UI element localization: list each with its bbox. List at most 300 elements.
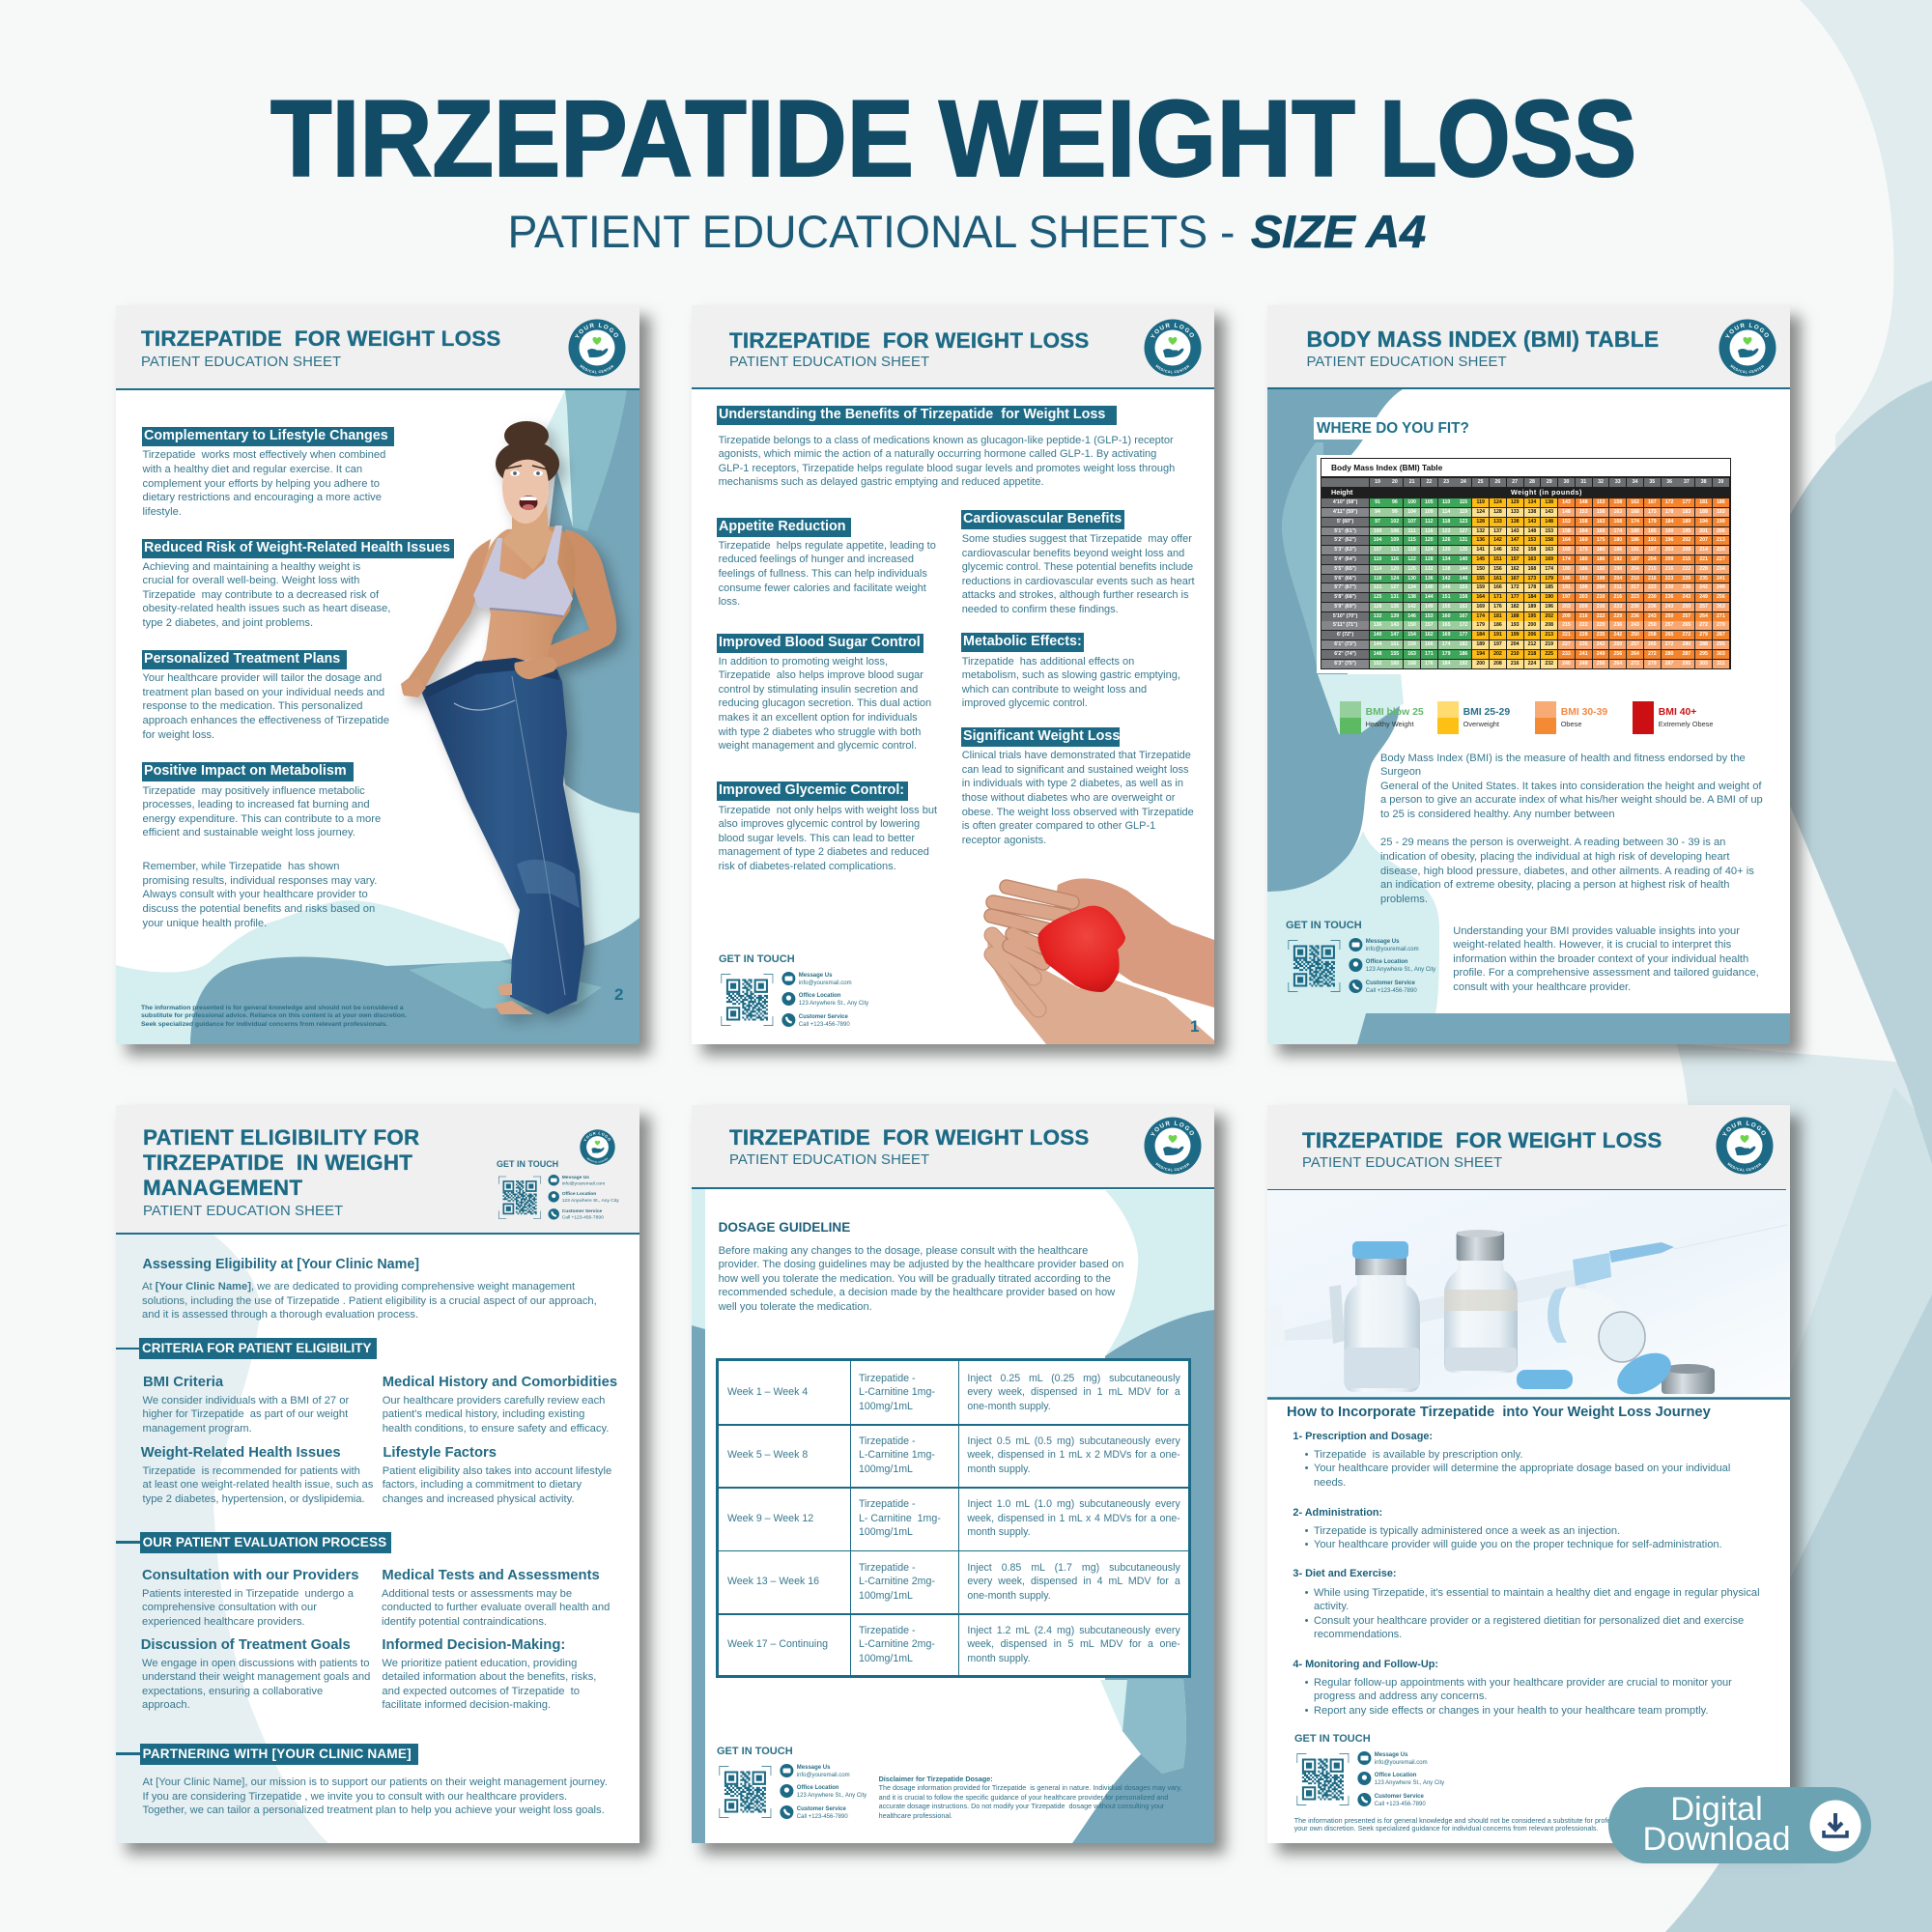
BMI table: 35 bbox=[1649, 479, 1655, 485]
dosage table: L-Carnitine 1mg- bbox=[859, 1386, 935, 1398]
BMI table: 5' (60") bbox=[1337, 519, 1353, 525]
BMI table: 191 bbox=[1648, 537, 1657, 543]
BMI table: 250 bbox=[1665, 613, 1673, 619]
contact block: Office Location bbox=[561, 1191, 596, 1197]
sheet title: TIRZEPATIDE FOR WEIGHT LOSS bbox=[729, 328, 1090, 352]
text: treatment goals: understand their weight management goals and bbox=[142, 1671, 370, 1683]
BMI table: 206 bbox=[1717, 528, 1725, 534]
heading: glycemic: Improved Glycemic Control: bbox=[719, 782, 904, 798]
BMI table: 197 bbox=[1562, 594, 1571, 600]
dosage table: week, dispensed in 1 mL x 2 MDVs for a one- bbox=[967, 1449, 1180, 1461]
BMI table: 235 bbox=[1597, 632, 1605, 638]
subheading: medical history: Medical History and Comorbidities bbox=[383, 1375, 617, 1390]
BMI table: 172 bbox=[1665, 499, 1673, 505]
contact block: Message Us bbox=[798, 973, 833, 979]
digital download badge: Download bbox=[1643, 1821, 1790, 1858]
header bbox=[692, 305, 1214, 389]
BMI table: 6' (72") bbox=[1337, 632, 1353, 638]
BMI table: 256 bbox=[1717, 594, 1725, 600]
BMI table: 32 bbox=[1598, 479, 1604, 485]
BMI table: 186 bbox=[1597, 556, 1605, 562]
logo bbox=[580, 1129, 615, 1165]
logo bbox=[1716, 1117, 1774, 1175]
BMI table: 5'10" (70") bbox=[1333, 613, 1357, 619]
section bar: evaluation: OUR PATIENT EVALUATION PROCESS bbox=[143, 1535, 386, 1549]
BMI table: 186 bbox=[1613, 547, 1622, 553]
text: BMI definition: General of the United States. It takes into consideration the height and weight of bbox=[1380, 781, 1762, 792]
text: intro: mechanisms such as delayed gastric emptying and reduced appetite. bbox=[719, 476, 1044, 488]
legend: Healthy Weight bbox=[1366, 719, 1414, 728]
BMI table: 116 bbox=[1391, 556, 1399, 562]
text: appetite: reduced feelings of hunger and increased bbox=[719, 554, 914, 565]
heading: appetite: Appetite Reduction bbox=[719, 518, 845, 533]
text: significant: is often greater compared to other GLP-1 bbox=[962, 820, 1155, 832]
BMI table: 138 bbox=[1511, 519, 1520, 525]
text: partnering bbox=[143, 1776, 608, 1818]
BMI table: 171 bbox=[1493, 594, 1502, 600]
dosage table: Inject 0.5 mL (0.5 mg) subcutaneously every bbox=[967, 1435, 1180, 1447]
header bbox=[692, 1105, 1214, 1189]
BMI table: 143 bbox=[1545, 509, 1553, 515]
BMI table: 288 bbox=[1699, 641, 1708, 647]
BMI table: 6'3" (75") bbox=[1334, 661, 1356, 667]
BMI table: 5'4" (64") bbox=[1334, 556, 1356, 562]
BMI table: 174 bbox=[1442, 641, 1450, 647]
text: understanding BMI bbox=[1453, 925, 1759, 993]
BMI table: 5'3" (63") bbox=[1334, 547, 1356, 553]
text: reminder: Always consult with your healthcare provider to bbox=[143, 889, 368, 900]
text: BMI criteria bbox=[143, 1395, 350, 1435]
BMI table: 149 bbox=[1425, 604, 1434, 610]
text: metabolic: improved glycemic control. bbox=[962, 697, 1088, 709]
BMI table: 192 bbox=[1613, 556, 1622, 562]
BMI table: 209 bbox=[1562, 613, 1571, 619]
BMI table: 5'9" (69") bbox=[1334, 604, 1356, 610]
step 3: 3- Diet and Exercise: bbox=[1293, 1568, 1397, 1579]
text: glycemic: management of type 2 diabetes and reduced bbox=[719, 846, 929, 858]
contact block: Customer Service bbox=[561, 1208, 602, 1214]
BMI table: 199 bbox=[1511, 632, 1520, 638]
text: assessing eligibility: solutions, including the use of Tirzepatide . Patient eligibility is a crucial aspect of our approach, bbox=[142, 1295, 597, 1307]
contact block bbox=[497, 1159, 619, 1221]
text: appetite bbox=[719, 540, 936, 608]
BMI table: 97 bbox=[1375, 519, 1380, 525]
BMI table: 157 bbox=[1425, 622, 1434, 628]
BMI table: 199 bbox=[1717, 519, 1725, 525]
BMI table: 223 bbox=[1613, 604, 1622, 610]
text: complementary: lifestyle. bbox=[143, 506, 182, 518]
contact block: Message Us bbox=[1365, 939, 1400, 945]
text: significant: Clinical trials have demonstrated that Tirzepatide bbox=[962, 750, 1191, 761]
BMI table: 200 bbox=[1476, 661, 1485, 667]
BMI table: 151 bbox=[1442, 594, 1450, 600]
BMI table: 209 bbox=[1665, 556, 1673, 562]
BMI table: 5'2" (62") bbox=[1334, 537, 1356, 543]
BMI table: 141 bbox=[1476, 547, 1485, 553]
heading: dosage guideline: DOSAGE GUIDELINE bbox=[719, 1219, 850, 1235]
BMI table: 242 bbox=[1597, 641, 1605, 647]
text: treatment goals: approach. bbox=[142, 1699, 190, 1711]
BMI table: 243 bbox=[1631, 622, 1639, 628]
text: partnering: If you are considering Tirzepatide , we invite you to consult with our healthcare providers. bbox=[143, 1791, 567, 1803]
BMI table: 192 bbox=[1460, 661, 1467, 667]
BMI table: 153 bbox=[1528, 537, 1536, 543]
BMI table: 197 bbox=[1631, 556, 1639, 562]
text: dosage intro: Before making any changes to the dosage, please consult with the healthcare bbox=[719, 1245, 1088, 1257]
text: consultation: comprehensive consultation with our bbox=[142, 1602, 317, 1613]
BMI table: 153 bbox=[1425, 613, 1434, 619]
BMI table: 235 bbox=[1699, 576, 1708, 582]
BMI table: 235 bbox=[1579, 641, 1588, 647]
BMI table: 208 bbox=[1683, 547, 1690, 553]
text: lifestyle: changes and increased physical activity. bbox=[383, 1493, 574, 1505]
subtitle: PATIENT EDUCATIONAL SHEETS - bbox=[508, 206, 1235, 257]
BMI table: 188 bbox=[1699, 509, 1708, 515]
dosage table: 100mg/1mL bbox=[859, 1653, 913, 1664]
BMI table: 198 bbox=[1579, 584, 1588, 590]
text: understanding BMI: information within the broader context of your individual health bbox=[1453, 953, 1748, 965]
heading: how to incorporate: How to Incorporate Tirzepatide into Your Weight Loss Journey bbox=[1287, 1405, 1711, 1420]
BMI table: 158 bbox=[1597, 509, 1605, 515]
BMI table: 232 bbox=[1545, 661, 1553, 667]
text: decision making: facilitate informed decision-making. bbox=[382, 1699, 551, 1711]
BMI table: 179 bbox=[1545, 576, 1553, 582]
BMI table: 159 bbox=[1407, 641, 1416, 647]
BMI table: 295 bbox=[1717, 641, 1725, 647]
sheet title: PATIENT ELIGIBILITY FOR bbox=[143, 1125, 419, 1150]
footnote: The information presented is for general knowledge and should not be considered a bbox=[141, 1005, 404, 1010]
text: significant bbox=[962, 750, 1194, 846]
BMI table: 118 bbox=[1442, 519, 1450, 525]
BMI table: 174 bbox=[1613, 528, 1622, 534]
text: significant: receptor agonists. bbox=[962, 835, 1046, 846]
text: cardiovascular: Some studies suggest that Tirzepatide may offer bbox=[962, 533, 1192, 545]
sheet subtitle: PATIENT EDUCATION SHEET bbox=[1302, 1155, 1502, 1171]
BMI table: 133 bbox=[1493, 519, 1502, 525]
text: BMI ranges bbox=[1380, 837, 1754, 905]
step 3: recommendations. bbox=[1314, 1629, 1402, 1640]
BMI table: 210 bbox=[1597, 594, 1605, 600]
BMI table: 107 bbox=[1407, 519, 1416, 525]
step 1: Tirzepatide is available by prescription only. bbox=[1314, 1449, 1522, 1461]
text: consultation: experienced healthcare providers. bbox=[142, 1616, 305, 1628]
text: intro bbox=[719, 435, 1175, 488]
BMI table: 135 bbox=[1460, 547, 1467, 553]
BMI table: 229 bbox=[1613, 613, 1622, 619]
contact block: GET IN TOUCH bbox=[719, 953, 794, 965]
BMI table: 227 bbox=[1717, 556, 1725, 562]
text: blood sugar: In addition to promoting weight loss, bbox=[719, 656, 888, 668]
BMI table: 163 bbox=[1545, 547, 1553, 553]
dosage table: L- Carnitine 1mg- bbox=[859, 1513, 941, 1524]
heading: significant: Significant Weight Loss bbox=[963, 728, 1120, 744]
disclaimer: and it is crucial to follow the specific guidance of your healthcare provider for personalized and bbox=[879, 1793, 1168, 1802]
BMI table: 264 bbox=[1699, 613, 1708, 619]
BMI table: 168 bbox=[1613, 519, 1622, 525]
text: lifestyle: factors, including a commitment to dietary bbox=[383, 1479, 582, 1491]
step 4: Report any side effects or changes in your health to your healthcare team promptly. bbox=[1314, 1705, 1708, 1717]
dosage table: Week 13 – Week 16 bbox=[727, 1576, 819, 1587]
BMI table: 168 bbox=[1631, 509, 1639, 515]
BMI table: 147 bbox=[1511, 537, 1520, 543]
BMI table: 212 bbox=[1528, 641, 1536, 647]
BMI table: 180 bbox=[1631, 528, 1639, 534]
text: medical history: Our healthcare providers carefully review each bbox=[383, 1395, 605, 1406]
text: understanding BMI: weight-related health. However, it is crucial to interpret this bbox=[1453, 939, 1731, 951]
BMI table: 250 bbox=[1613, 641, 1622, 647]
BMI table: 216 bbox=[1579, 613, 1588, 619]
BMI table: 228 bbox=[1699, 566, 1708, 572]
BMI table: 178 bbox=[1665, 509, 1673, 515]
BMI table: 119 bbox=[1476, 499, 1485, 505]
dosage table: week, dispensed in 5 mL MDV for a one- bbox=[967, 1638, 1180, 1650]
contact block: Call +123-456-7890 bbox=[1365, 988, 1417, 994]
panel: sheet 5 dosage guideline bbox=[692, 1105, 1214, 1843]
text: metabolism: Tirzepatide may positively influence metabolic bbox=[143, 785, 365, 797]
logo: MEDICAL CENTER bbox=[1155, 365, 1190, 373]
dosage table: every week, dispensed in 1 mL MDV for a bbox=[967, 1386, 1180, 1398]
text: metabolic: which can contribute to weight loss and bbox=[962, 684, 1147, 696]
BMI table: 163 bbox=[1407, 651, 1416, 657]
text: reduced risk: Tirzepatide may contribute to a decreased risk of bbox=[143, 589, 379, 601]
BMI table: 158 bbox=[1579, 519, 1588, 525]
text: treatment goals: We engage in open discussions with patients to bbox=[142, 1658, 369, 1669]
BMI table: 158 bbox=[1613, 499, 1622, 505]
dosage table: Tirzepatide - bbox=[859, 1373, 915, 1384]
BMI table: 248 bbox=[1579, 661, 1588, 667]
BMI table: 105 bbox=[1425, 499, 1434, 505]
step 1: 1- Prescription and Dosage: bbox=[1293, 1431, 1433, 1442]
BMI table: 229 bbox=[1683, 576, 1690, 582]
step 3: While using Tirzepatide, it's essential to maintain a healthy diet and engage in regular physical bbox=[1314, 1587, 1760, 1599]
BMI table: 153 bbox=[1597, 499, 1605, 505]
BMI table: 186 bbox=[1631, 537, 1639, 543]
text: blood sugar bbox=[719, 656, 931, 752]
contact block bbox=[1294, 1730, 1459, 1809]
BMI table: 185 bbox=[1648, 528, 1657, 534]
dosage table: 100mg/1mL bbox=[859, 1526, 913, 1538]
BMI table: 164 bbox=[1579, 528, 1588, 534]
BMI table: 38 bbox=[1701, 479, 1706, 485]
BMI table: 202 bbox=[1545, 613, 1553, 619]
sheet subtitle: PATIENT EDUCATION SHEET bbox=[1306, 355, 1507, 370]
BMI table: 177 bbox=[1683, 499, 1690, 505]
BMI table: 176 bbox=[1425, 661, 1434, 667]
text: medical history: health conditions, to ensure safety and efficacy. bbox=[383, 1423, 609, 1435]
BMI table: 256 bbox=[1597, 661, 1605, 667]
text: personalized: response to the medication. This personalized bbox=[143, 700, 363, 712]
BMI table: 197 bbox=[1493, 641, 1502, 647]
BMI table: 250 bbox=[1631, 632, 1639, 638]
contact block: GET IN TOUCH bbox=[1286, 920, 1361, 931]
dosage table: Tirzepatide - bbox=[859, 1435, 915, 1447]
BMI table: 138 bbox=[1407, 594, 1416, 600]
title bbox=[270, 78, 1636, 199]
BMI table: 128 bbox=[1425, 556, 1434, 562]
dosage table: Inject 1.0 mL (1.0 mg) subcutaneously every bbox=[967, 1498, 1180, 1510]
BMI table: 311 bbox=[1717, 661, 1725, 667]
text: personalized: for weight loss. bbox=[143, 729, 214, 741]
logo: MEDICAL CENTER bbox=[580, 365, 614, 373]
contact block: GET IN TOUCH bbox=[497, 1159, 558, 1169]
BMI table: 271 bbox=[1717, 613, 1725, 619]
BMI table: 216 bbox=[1613, 594, 1622, 600]
BMI table: 164 bbox=[1562, 537, 1571, 543]
logo: YOUR LOGO bbox=[574, 323, 618, 338]
BMI table: 303 bbox=[1699, 661, 1708, 667]
header bbox=[116, 1105, 639, 1235]
text: metabolic: Tirzepatide has additional effects on bbox=[962, 656, 1134, 668]
text: partnering: At [Your Clinic Name], our mission is to support our patients on their weight management journey. bbox=[143, 1776, 608, 1788]
BMI table: 150 bbox=[1407, 622, 1416, 628]
header bbox=[1267, 305, 1790, 389]
BMI table: 216 bbox=[1511, 661, 1520, 667]
dosage table: Inject 0.25 mL (0.25 mg) subcutaneously bbox=[967, 1373, 1180, 1384]
contact block bbox=[1286, 920, 1435, 994]
BMI table: 241 bbox=[1717, 576, 1725, 582]
BMI table: 189 bbox=[1528, 604, 1536, 610]
BMI table bbox=[1317, 455, 1734, 673]
BMI table: 204 bbox=[1631, 566, 1639, 572]
BMI table: 160 bbox=[1442, 613, 1450, 619]
BMI table: 225 bbox=[1545, 651, 1553, 657]
BMI table: 207 bbox=[1699, 537, 1708, 543]
dosage table: Tirzepatide - bbox=[859, 1625, 915, 1636]
BMI table: 174 bbox=[1476, 613, 1485, 619]
BMI table: 91 bbox=[1375, 499, 1380, 505]
header bbox=[116, 305, 639, 390]
text: dosage intro: how well you tolerate the medication. You will be gradually titrated according to the bbox=[719, 1273, 1111, 1285]
step 4: • bbox=[1305, 1677, 1308, 1689]
BMI table: 5'11" (71") bbox=[1333, 622, 1357, 628]
text: personalized: treatment plan based on your individual needs and bbox=[143, 687, 384, 698]
BMI table: 153 bbox=[1460, 584, 1467, 590]
BMI table: 229 bbox=[1597, 622, 1605, 628]
text: complementary: complement your efforts by helping you adhere to bbox=[143, 478, 380, 490]
BMI table: 162 bbox=[1460, 604, 1467, 610]
text: weight related: type 2 diabetes, hypertension, or dyslipidemia. bbox=[143, 1493, 365, 1505]
BMI table: 184 bbox=[1476, 632, 1485, 638]
BMI table: 215 bbox=[1683, 556, 1690, 562]
BMI table: 142 bbox=[1493, 537, 1502, 543]
BMI table: 272 bbox=[1631, 661, 1639, 667]
BMI table: 144 bbox=[1374, 641, 1381, 647]
BMI table: 194 bbox=[1699, 519, 1708, 525]
text: blood sugar: with type 2 diabetes who struggle with both bbox=[719, 726, 921, 738]
contact block: Call +123-456-7890 bbox=[797, 1814, 848, 1820]
BMI table: 227 bbox=[1562, 641, 1571, 647]
BMI table: 295 bbox=[1683, 661, 1690, 667]
sheet subtitle: PATIENT EDUCATION SHEET bbox=[143, 1204, 343, 1219]
BMI table: 185 bbox=[1545, 584, 1553, 590]
BMI table: 193 bbox=[1511, 622, 1520, 628]
BMI table: 151 bbox=[1391, 641, 1399, 647]
text: intro: agonists, which mimic the action of a naturally occurring hormone called GLP-1. By activating bbox=[719, 448, 1156, 460]
step 1: needs. bbox=[1314, 1477, 1346, 1489]
BMI table: 129 bbox=[1511, 499, 1520, 505]
BMI table: 258 bbox=[1648, 632, 1657, 638]
BMI table: 204 bbox=[1597, 584, 1605, 590]
text: lifestyle: Patient eligibility also takes into account lifestyle bbox=[383, 1465, 611, 1477]
disclaimer: accurate dosage instructions. Do not modify your Tirzepatide dosage without consulting your bbox=[879, 1802, 1164, 1810]
BMI table: 169 bbox=[1562, 547, 1571, 553]
step 3: Consult your healthcare provider or a registered dietitian for personalized diet and exercise bbox=[1314, 1615, 1744, 1627]
subheading: treatment goals: Discussion of Treatment Goals bbox=[141, 1636, 351, 1652]
text: reduced risk: obesity-related health issues such as heart disease, bbox=[143, 603, 390, 614]
subheading: consultation: Consultation with our Providers bbox=[142, 1567, 358, 1582]
BMI table: 22 bbox=[1426, 479, 1432, 485]
BMI table: 210 bbox=[1511, 651, 1520, 657]
contact block: Office Location bbox=[798, 993, 840, 999]
dosage table: one-month supply. bbox=[967, 1590, 1051, 1602]
text: cardiovascular bbox=[962, 533, 1195, 615]
BMI table: 163 bbox=[1613, 509, 1622, 515]
BMI table: 190 bbox=[1665, 528, 1673, 534]
text: dosage intro: well you tolerate the medication. bbox=[719, 1301, 872, 1313]
BMI table: 184 bbox=[1442, 661, 1450, 667]
text: reminder: Remember, while Tirzepatide has shown bbox=[143, 861, 339, 872]
BMI table: 249 bbox=[1699, 594, 1708, 600]
BMI table: 191 bbox=[1493, 632, 1502, 638]
BMI table: 166 bbox=[1425, 641, 1434, 647]
BMI table: 265 bbox=[1683, 622, 1690, 628]
BMI table: 256 bbox=[1613, 651, 1622, 657]
BMI table: 263 bbox=[1717, 604, 1725, 610]
text: cardiovascular: needed to confirm these findings. bbox=[962, 604, 1119, 615]
BMI table: 186 bbox=[1579, 566, 1588, 572]
BMI table: 280 bbox=[1683, 641, 1690, 647]
text: appetite: consume fewer calories and facilitate weight bbox=[719, 582, 926, 594]
illustration: woman in oversized jeans bbox=[401, 421, 630, 1028]
BMI table: Body Mass Index (BMI) Table bbox=[1331, 463, 1442, 472]
BMI table: 250 bbox=[1683, 604, 1690, 610]
legend: Overweight bbox=[1463, 719, 1499, 728]
BMI table: 155 bbox=[1476, 576, 1485, 582]
BMI table: 217 bbox=[1631, 584, 1639, 590]
BMI table: 152 bbox=[1511, 547, 1520, 553]
legend: BMI blow 25 bbox=[1366, 707, 1424, 718]
dosage table: week, dispensed in 1 mL x 4 MDVs for a one- bbox=[967, 1513, 1180, 1524]
text: metabolism bbox=[143, 785, 381, 838]
sheet title bbox=[143, 1125, 419, 1200]
BMI table: 116 bbox=[1425, 528, 1434, 534]
text: understanding BMI: Understanding your BMI provides valuable insights into your bbox=[1453, 925, 1740, 937]
BMI table: 194 bbox=[1476, 651, 1485, 657]
BMI table: 25 bbox=[1478, 479, 1484, 485]
text: dosage intro bbox=[719, 1244, 1123, 1315]
logo: YOUR LOGO bbox=[1721, 1121, 1766, 1136]
dosage table: month supply. bbox=[967, 1526, 1031, 1538]
contact block bbox=[717, 1743, 881, 1822]
dosage table: 100mg/1mL bbox=[859, 1401, 913, 1412]
BMI table: 216 bbox=[1597, 604, 1605, 610]
dosage table: one-month supply. bbox=[967, 1401, 1051, 1412]
text: metabolic bbox=[962, 656, 1180, 709]
BMI table: 21 bbox=[1409, 479, 1414, 485]
BMI table: 219 bbox=[1545, 641, 1553, 647]
BMI table: 148 bbox=[1545, 519, 1553, 525]
text: cardiovascular: attacks and strokes, although further research is bbox=[962, 589, 1188, 601]
logo: YOUR LOGO bbox=[1150, 323, 1194, 338]
dosage table: month supply. bbox=[967, 1653, 1031, 1664]
BMI table: 128 bbox=[1374, 604, 1381, 610]
BMI table: 140 bbox=[1425, 584, 1434, 590]
text: blood sugar: reducing glucagon secretion. This dual action bbox=[719, 697, 931, 709]
step 3: • bbox=[1305, 1615, 1308, 1627]
contact block: Office Location bbox=[1375, 1773, 1417, 1778]
disclaimer: The dosage information provided for Tirzepatide is general in nature. Individual dosages may vary, bbox=[879, 1783, 1182, 1792]
BMI table: 162 bbox=[1511, 566, 1520, 572]
